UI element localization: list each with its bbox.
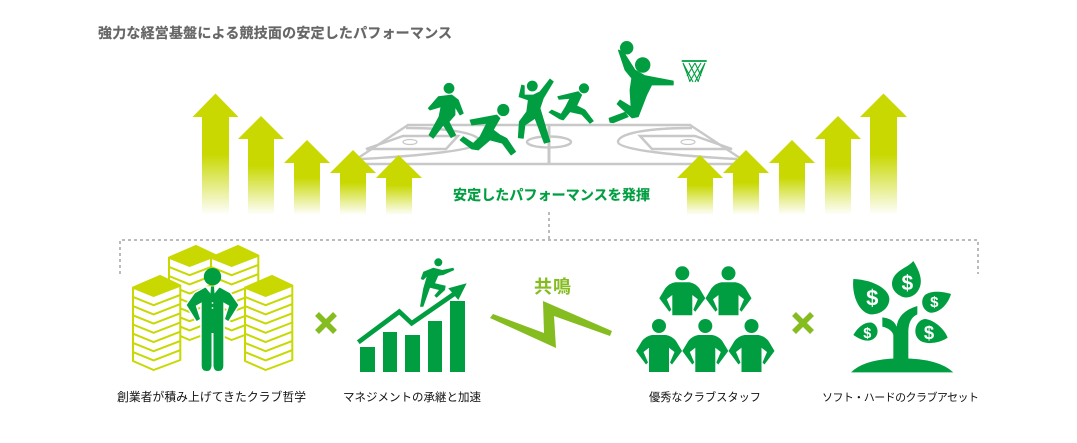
label: excellent staff: 優秀なクラブスタッフ (649, 390, 761, 404)
icon: five staff members (636, 266, 774, 372)
multiply sign right (794, 314, 812, 332)
icon: money tree: $ (866, 286, 878, 310)
icon: growth chart with runner (358, 258, 467, 372)
resonance bolt (490, 301, 612, 348)
resonance label: 共鳴 (534, 277, 571, 297)
label: club philosophy: 創業者が積み上げてきたクラブ哲学 (117, 390, 306, 404)
icon: money tree: $ (930, 294, 939, 311)
player 2 lunging (460, 104, 516, 155)
basketball court (349, 125, 749, 164)
subheading: stable performance: 安定したパフォーマンスを発揮 (453, 187, 650, 203)
left rising arrows (192, 94, 422, 215)
title: 強力な経営基盤による競技面の安定したパフォーマンス (98, 25, 452, 41)
multiply sign left (317, 314, 335, 332)
player 1 walking (428, 83, 463, 138)
icon: money tree: $ (901, 272, 913, 295)
icon: money tree (851, 261, 953, 372)
player 3 arms raised (518, 79, 553, 143)
player 4 running (549, 84, 593, 123)
dotted connector (120, 212, 978, 274)
player 5 jumping with ball (609, 41, 673, 123)
label: management succession: マネジメントの承継と加速 (343, 391, 482, 404)
icon: money tree: $ (863, 326, 871, 342)
icon: money tree: $ (924, 322, 935, 343)
icon: founder with stacked books (133, 246, 292, 371)
basketball hoop (682, 61, 707, 82)
label: soft and hard assets: ソフト・ハードのクラブアセット (822, 390, 979, 404)
right rising arrows (677, 94, 907, 215)
